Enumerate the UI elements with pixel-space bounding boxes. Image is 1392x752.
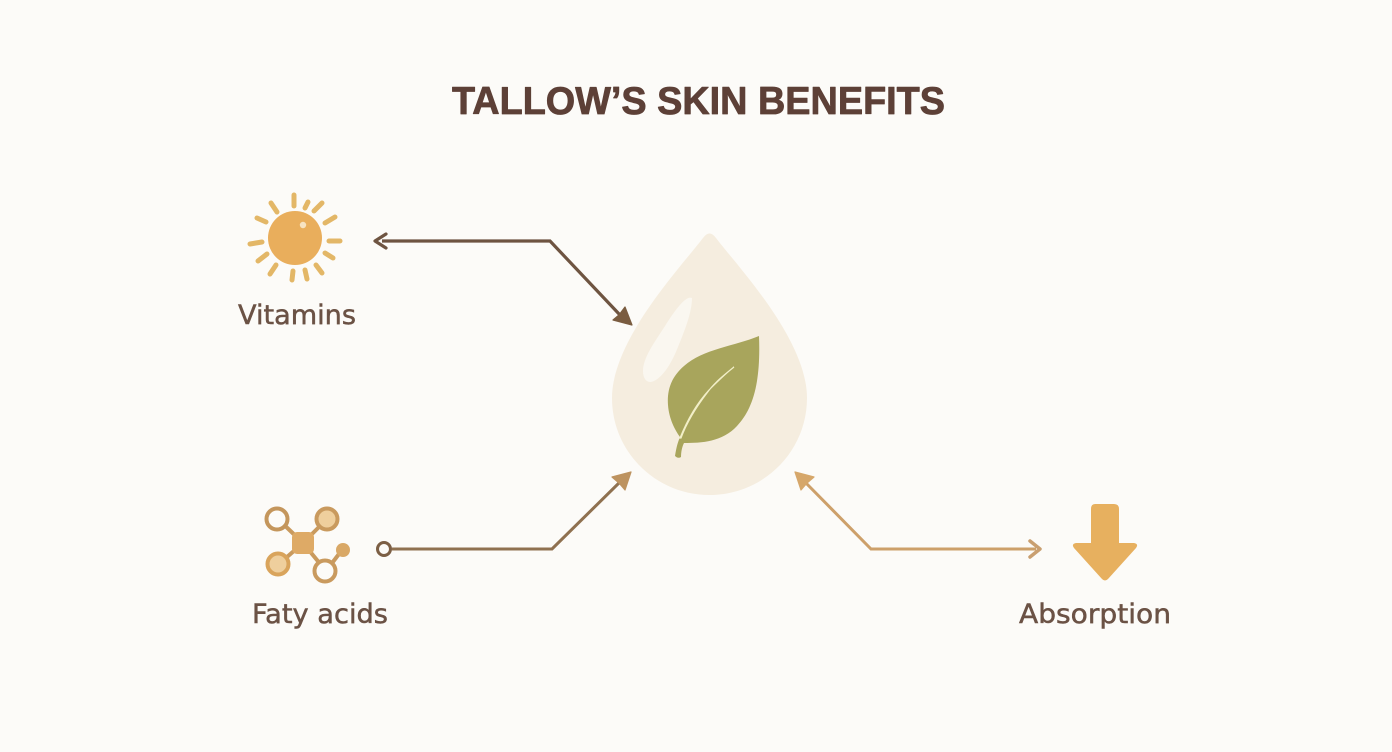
- icon: down arrow: [1073, 504, 1137, 580]
- arrow: absorption to drop: [795, 472, 1040, 557]
- droplet highlight: [643, 298, 692, 382]
- label: Faty acids: Faty acids: [252, 599, 388, 630]
- label: Vitamins: Vitamins: [238, 300, 356, 331]
- droplet: [612, 234, 807, 495]
- leaf midrib: [680, 367, 734, 438]
- icon: sun: [250, 195, 340, 280]
- icon: molecule: [266, 508, 350, 582]
- icon: leaf: [668, 336, 759, 458]
- arrow: vitamins to drop: [375, 234, 632, 325]
- label: Absorption: Absorption: [1019, 599, 1171, 630]
- arrow: fatty acids to drop: [378, 472, 631, 556]
- title: TALLOW’S SKIN BENEFITS: [452, 80, 945, 123]
